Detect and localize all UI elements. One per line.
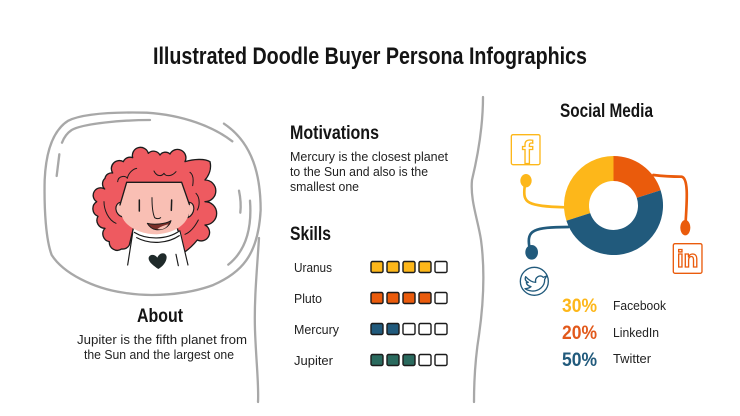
title: Illustrated Doodle Buyer Persona Infographics xyxy=(153,43,587,70)
face xyxy=(120,182,190,234)
panel: about xyxy=(45,113,261,362)
legend: linkedin xyxy=(562,323,659,344)
motivations text: Mercury is the closest planet xyxy=(290,150,449,164)
legend: facebook: Facebook xyxy=(613,299,667,313)
heart xyxy=(149,253,167,269)
skill: Uranus xyxy=(294,261,447,275)
legend: facebook: 30% xyxy=(562,296,597,317)
connector: linkedin xyxy=(653,175,690,235)
icon: linkedin xyxy=(673,244,702,273)
connector: facebook xyxy=(520,174,565,207)
hair curls xyxy=(104,168,199,234)
nose xyxy=(152,198,161,219)
legend: facebook xyxy=(562,296,667,317)
about text: Jupiter is the fifth planet from xyxy=(77,333,247,347)
legend: twitter xyxy=(562,350,651,371)
legend: social shares xyxy=(562,296,667,371)
skill: Pluto xyxy=(294,292,447,306)
skill: Mercury: Mercury xyxy=(294,323,340,337)
heading: skills: Skills xyxy=(290,224,331,245)
legend: linkedin: 20% xyxy=(562,323,597,344)
icon: facebook: f xyxy=(522,134,533,170)
hair xyxy=(93,147,217,252)
icon: facebook xyxy=(511,134,540,170)
connectors and social icons xyxy=(511,134,702,295)
legend: twitter: Twitter xyxy=(613,352,651,366)
panel: skills xyxy=(294,261,447,368)
legend: linkedin: LinkedIn xyxy=(613,326,659,340)
ears xyxy=(116,202,194,218)
heading: social media: Social Media xyxy=(560,101,653,122)
skill: Uranus: Uranus xyxy=(294,261,332,275)
skill: Jupiter xyxy=(294,354,447,368)
avatar frame xyxy=(45,113,261,295)
collar xyxy=(134,231,179,242)
right divider xyxy=(472,97,483,402)
icon: linkedin: in xyxy=(677,246,698,273)
avatar illustration xyxy=(93,147,217,269)
body xyxy=(127,231,188,266)
mouth xyxy=(147,221,171,230)
eyes xyxy=(139,200,172,211)
icon: twitter xyxy=(520,267,548,295)
legend: twitter: 50% xyxy=(562,350,597,371)
motivations text: to the Sun and also is the xyxy=(290,165,428,179)
donut chart xyxy=(564,156,663,255)
skill: Mercury xyxy=(294,323,447,337)
motivations text: smallest one xyxy=(290,180,359,194)
about text: the Sun and the largest one xyxy=(84,348,234,362)
connector: twitter xyxy=(525,227,568,260)
skill: Jupiter: Jupiter xyxy=(294,354,333,368)
heading: motivations: Motivations xyxy=(290,123,379,144)
skill: Pluto: Pluto xyxy=(294,292,322,306)
heading: about: About xyxy=(137,306,184,327)
left divider xyxy=(255,238,259,402)
